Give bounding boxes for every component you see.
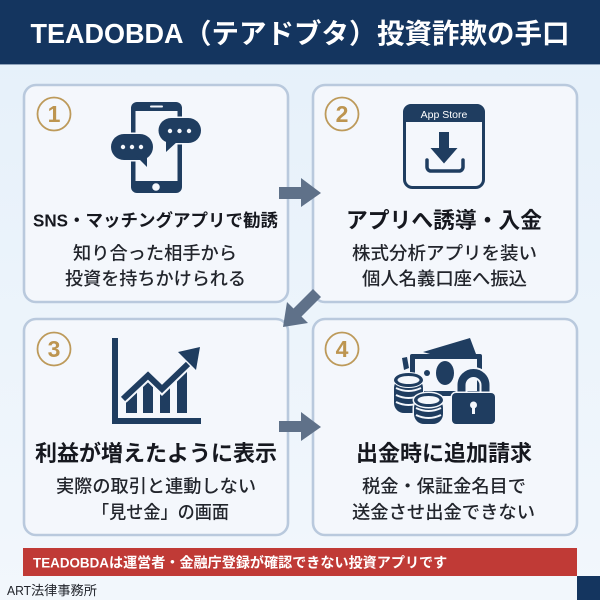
arrow: step 3 to step 4 (279, 412, 321, 441)
number badge 3 (38, 332, 70, 366)
number badge 1 (38, 98, 70, 130)
heading 1: ・マッチングアプリで勧誘 (68, 210, 278, 230)
body text 2: 株式分析アプリを装い (352, 244, 537, 264)
heading 3: 利益が増えたように表示 (35, 441, 277, 466)
body text 3 (56, 476, 256, 522)
body text 2: 個人名義口座へ振込 (362, 269, 527, 289)
body text 2 (352, 244, 537, 289)
number badge 2: 2 (336, 101, 348, 127)
icon: money, coins and padlock (394, 338, 495, 424)
body text 4 (352, 476, 535, 522)
panel: step 1 (24, 85, 288, 302)
panel: step 3 (24, 319, 288, 535)
heading 4: 出金時に追加請求 (356, 441, 532, 466)
number badge 1: 1 (48, 101, 61, 127)
icon: smartphone with chat bubbles (111, 102, 201, 193)
heading 1: SNS (33, 210, 68, 230)
number badge 3: 3 (48, 336, 60, 362)
icon part: coin stacks (394, 373, 443, 424)
arrow: step 2 to step 3 (283, 289, 321, 327)
panel: step 2 (313, 85, 577, 302)
number badge 4 (326, 332, 358, 366)
title: 投資詐欺の手口 (377, 18, 570, 49)
footer credit: ART (7, 583, 31, 598)
icon: rising bar chart (112, 338, 201, 424)
body text 3: 実際の取引と連動しない (56, 476, 256, 496)
heading 2: アプリへ誘導・入金 (346, 208, 542, 233)
footer credit: 法律事務所 (31, 583, 97, 598)
title: （テアドブタ） (184, 18, 376, 49)
corner block (577, 576, 600, 600)
body text 3: 「見せ金」の画面 (92, 502, 229, 522)
body text 1 (65, 244, 246, 289)
banner text: は運営者・金融庁登録が確認できない投資アプリです (109, 554, 447, 570)
header band (0, 0, 600, 65)
panel: step 4 (313, 319, 577, 535)
icon part: padlock (452, 373, 495, 424)
icon: App Store download: App Store (421, 109, 468, 121)
icon: App Store download (403, 104, 485, 188)
number badge 4: 4 (336, 336, 349, 362)
number badge 2 (326, 98, 358, 130)
warning banner (23, 548, 577, 576)
title: TEADOBDA (30, 18, 184, 49)
body text 4: 税金・保証金名目で (362, 476, 526, 496)
body text 4: 送金させ出金できない (352, 502, 535, 522)
body text 1: 投資を持ちかけられる (65, 269, 246, 289)
title (30, 18, 570, 49)
banner text: TEADOBDA (33, 554, 109, 570)
body text 1: 知り合った相手から (73, 244, 237, 264)
arrow: step 1 to step 2 (279, 178, 321, 207)
